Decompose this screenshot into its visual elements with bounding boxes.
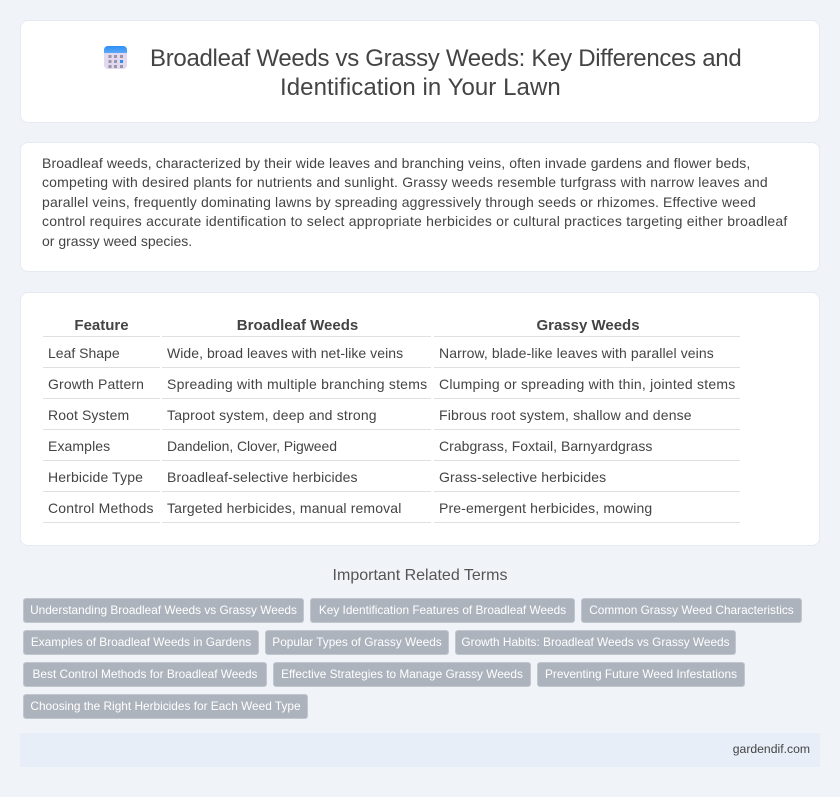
row: examples: Crabgrass, Foxtail, Barnyardgrass (439, 438, 652, 454)
related terms tags: Popular Types of Grassy Weeds (272, 635, 442, 649)
table header: Broadleaf Weeds (237, 317, 358, 334)
footer bar (20, 733, 820, 767)
row: control methods: Pre-emergent herbicides, mowing (439, 500, 652, 516)
row: examples: Examples (48, 438, 110, 454)
row: herbicide type: Grass-selective herbicides (439, 469, 606, 485)
row: examples (48, 438, 652, 454)
related terms tags: Understanding Broadleaf Weeds vs Grassy Weeds (30, 603, 297, 617)
related terms tags: Effective Strategies to Manage Grassy Weeds (281, 667, 523, 681)
intro paragraph: or grassy weed species. (42, 233, 192, 249)
title (150, 45, 741, 101)
table header: Grassy Weeds (536, 317, 640, 334)
related terms tags: Examples of Broadleaf Weeds in Gardens (31, 635, 251, 649)
row: leaf shape: Wide, broad leaves with net-like veins (167, 345, 403, 361)
row: growth pattern: Growth Pattern (48, 376, 144, 392)
comparison table panel (20, 292, 820, 546)
row: leaf shape: Narrow, blade-like leaves with parallel veins (439, 345, 714, 361)
row: control methods: Control Methods (48, 500, 154, 516)
row: herbicide type: Herbicide Type (48, 469, 143, 485)
row: leaf shape: Leaf Shape (48, 345, 120, 361)
intro paragraph: competing with desired plants for nutrients and sunlight. Grassy weeds resemble turfgrass with narrow leaves and (42, 174, 768, 190)
intro paragraph: parallel veins, frequently dominating lawns by spreading aggressively through seeds or rhizomes. Effective weed (42, 194, 756, 210)
related terms tags: Best Control Methods for Broadleaf Weeds (33, 667, 257, 681)
intro paragraph: control requires accurate identification to select appropriate herbicides or cultural practices targeting either broadleaf (42, 213, 788, 229)
related terms tags: Common Grassy Weed Characteristics (589, 603, 794, 617)
related terms tags: Growth Habits: Broadleaf Weeds vs Grassy Weeds (461, 635, 730, 649)
row: leaf shape (48, 345, 714, 361)
table header (74, 317, 640, 334)
comparison table (43, 317, 740, 523)
row: examples: Dandelion, Clover, Pigweed (167, 438, 337, 454)
related terms heading: Important Related Terms (333, 567, 507, 584)
icon: calendar (104, 46, 127, 69)
title: Identification in Your Lawn (280, 74, 561, 101)
row: control methods: Targeted herbicides, manual removal (167, 500, 401, 516)
header card (20, 20, 820, 123)
row: growth pattern (48, 376, 735, 392)
related terms tags: Choosing the Right Herbicides for Each Weed Type (30, 699, 301, 713)
table header: Feature (74, 317, 129, 334)
row: herbicide type: Broadleaf-selective herbicides (167, 469, 358, 485)
intro paragraph (42, 155, 788, 249)
row: growth pattern: Clumping or spreading with thin, jointed stems (439, 376, 735, 392)
related terms tags: Key Identification Features of Broadleaf Weeds (319, 603, 566, 617)
title: Broadleaf Weeds vs Grassy Weeds: Key Differences and (150, 45, 741, 72)
related terms tags: Preventing Future Weed Infestations (545, 667, 737, 681)
row: herbicide type (48, 469, 606, 485)
intro paragraph: Broadleaf weeds, characterized by their wide leaves and branching veins, often invade gardens and flower beds, (42, 155, 750, 171)
intro text panel (20, 142, 820, 272)
row: root system: Taproot system, deep and strong (167, 407, 377, 423)
row: root system: Root System (48, 407, 129, 423)
row: root system (48, 407, 692, 423)
row: root system: Fibrous root system, shallow and dense (439, 407, 692, 423)
footer source: gardendif.com (733, 742, 810, 756)
related terms tags (23, 598, 802, 719)
row: control methods (48, 500, 652, 516)
row: growth pattern: Spreading with multiple branching stems (167, 376, 427, 392)
